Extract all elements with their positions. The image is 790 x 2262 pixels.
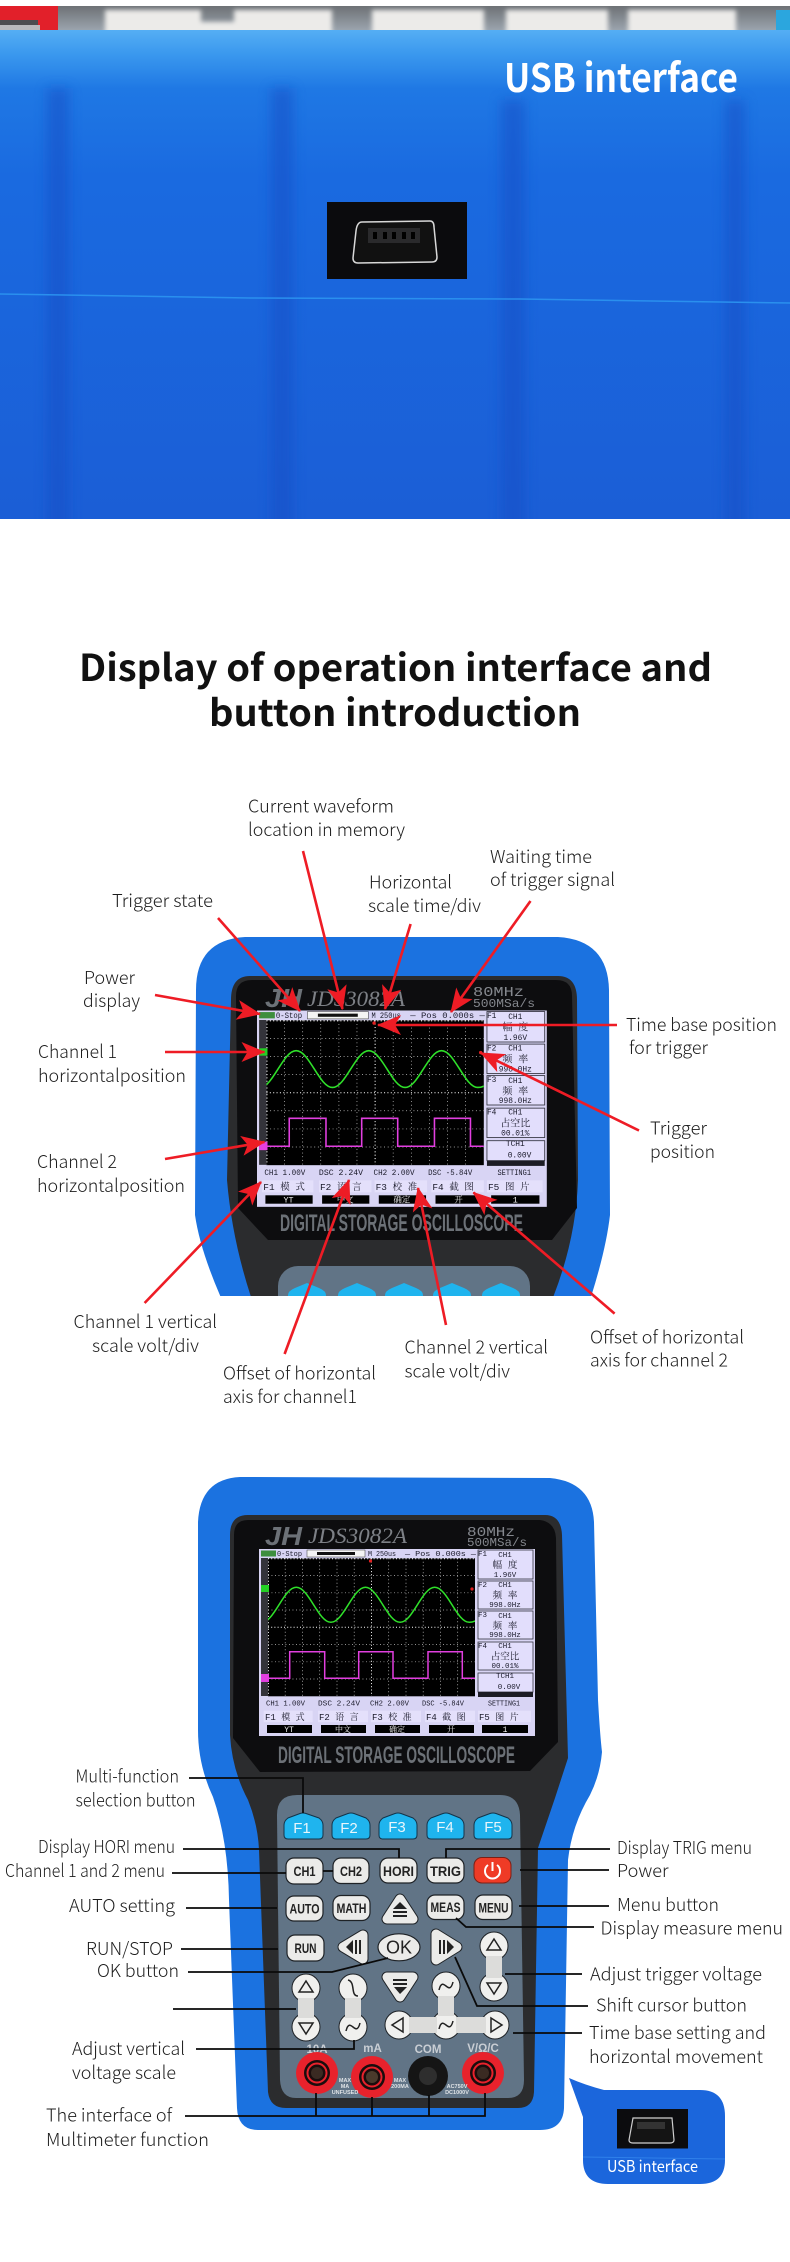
side menu: [487, 1012, 545, 1166]
keys: rounded buttons: TRIG: [430, 1863, 461, 1879]
side menu: F2: [478, 1582, 487, 1590]
logo: model name: JDS3082A: [307, 986, 406, 1011]
callout labels: screen: axis for channel1: [223, 1383, 357, 1409]
side menu: [478, 1550, 533, 1697]
callout labels: screen: scale volt/div: [92, 1332, 199, 1358]
function row: F2 语 言: [320, 1181, 362, 1193]
readout row: DSC -5.84V: [428, 1169, 473, 1178]
function keys: [284, 1813, 512, 1839]
side menu: 00.01%: [491, 1663, 519, 1671]
callout labels: buttons: Menu button: [617, 1891, 719, 1917]
callout labels: buttons: Adjust trigger voltage: [590, 1960, 762, 1986]
function row: 1: [503, 1726, 508, 1735]
function row: F1 模 式: [263, 1181, 305, 1193]
side menu: CH1: [508, 1077, 523, 1086]
side menu: F3: [478, 1612, 488, 1620]
callout labels: buttons: Multi-function: [76, 1762, 179, 1788]
device body: [230, 1515, 568, 2108]
side menu: 频 率: [502, 1052, 528, 1065]
callout labels: buttons: The interface of: [46, 2102, 173, 2128]
callout labels: buttons: Time base setting and: [589, 2019, 766, 2045]
callout labels: screen: horizontalposition: [38, 1062, 186, 1088]
top status bar: — Pos 0.000s —: [404, 1551, 477, 1559]
readout row: DSC 2.24V: [319, 1169, 363, 1178]
inset caption: USB interface: [607, 2153, 698, 2177]
function keys, partly visible: [288, 1283, 520, 1296]
function row: 中文: [337, 1194, 354, 1205]
callout labels: buttons: Channel 1 and 2 menu: [5, 1857, 165, 1883]
function row: F5 图 片: [488, 1181, 530, 1193]
multimeter jacks: V/Ω/C: [467, 2043, 499, 2055]
function row: YT: [284, 1726, 294, 1735]
multimeter jacks: 10A: [306, 2044, 328, 2056]
function row: 中文: [335, 1724, 351, 1735]
panel: USB interface photo: [0, 6, 790, 550]
function row: F5 图 片: [479, 1711, 519, 1723]
callout labels: buttons: voltage scale: [72, 2059, 176, 2085]
top status bar: 0-Stop: [276, 1012, 302, 1021]
key panel: [277, 1795, 524, 2098]
heading: USB interface: USB interface: [504, 48, 738, 104]
callout labels: screen: scale time/div: [368, 892, 481, 918]
device shell: [198, 1477, 602, 2130]
callout labels: screen: Channel 1: [38, 1038, 117, 1064]
readout row: CH1 1.00V: [266, 1700, 305, 1708]
callout labels: screen: [37, 792, 777, 1409]
top status bar: [259, 1012, 485, 1021]
title: Display of operation interface and: [79, 638, 712, 692]
callout labels: buttons: OK button: [97, 1957, 179, 1983]
multimeter jacks: MAX: [339, 2078, 351, 2084]
device caption: DIGITAL STORAGE OSCILLOSCOPE: [278, 1742, 515, 1769]
multimeter jacks: MA: [341, 2084, 349, 2090]
callout labels: screen: Power: [84, 964, 136, 990]
function row: 开: [454, 1195, 463, 1205]
function row: F4 截 图: [426, 1711, 466, 1723]
key panel, partly visible: [278, 1266, 530, 1296]
side menu: 占空比: [491, 1650, 520, 1662]
keys: rounded buttons: MEAS: [430, 1899, 460, 1915]
callout labels: screen: scale volt/div: [404, 1358, 510, 1384]
side menu: CH1: [508, 1044, 523, 1053]
blue silicone sleeve: [0, 30, 790, 519]
side menu: 0.00V: [508, 1152, 532, 1161]
side menu: 998.0Hz: [499, 1065, 532, 1074]
top status bar: M 250us: [371, 1012, 401, 1021]
callout labels: buttons: selection button: [76, 1786, 196, 1812]
side menu: CH1: [498, 1613, 512, 1621]
keys: rounded buttons: CH1: [294, 1863, 316, 1879]
callout labels: screen: location in memory: [248, 816, 405, 842]
callout labels: buttons: Adjust vertical: [72, 2035, 185, 2061]
multimeter jacks: UNFUSED: [332, 2090, 358, 2096]
keys: rounded buttons: [286, 1858, 512, 1961]
callout labels: buttons: RUN/STOP: [86, 1935, 173, 1961]
side menu: F4: [478, 1643, 488, 1651]
side menu: 998.0Hz: [489, 1602, 521, 1610]
logo: JH: JH: [265, 983, 303, 1013]
side menu: F3: [487, 1076, 497, 1085]
logo: specification: [467, 1525, 527, 1550]
side menu: CH1: [498, 1643, 512, 1651]
function row: F4 截 图: [432, 1181, 474, 1193]
function row: 确定: [394, 1194, 411, 1205]
callout labels: screen: axis for channel 2: [590, 1346, 728, 1372]
side menu: CH1: [508, 1108, 523, 1117]
top status bar: [261, 1550, 477, 1559]
callout labels: screen: Channel 2 vertical: [404, 1334, 548, 1360]
multimeter jacks: MAX: [394, 2078, 406, 2084]
multimeter jacks: COM: [415, 2044, 441, 2056]
callout labels: screen: Trigger state: [112, 887, 213, 913]
callout labels: buttons: [5, 1762, 783, 2152]
callout labels: buttons: AUTO setting: [69, 1892, 175, 1918]
side menu: F4: [487, 1108, 497, 1117]
title: button introduction: [209, 683, 581, 737]
function keys: F1: [293, 1820, 311, 1837]
side menu: CH1: [498, 1552, 512, 1560]
readout row: [266, 1700, 520, 1708]
callout labels: screen: display: [83, 987, 140, 1013]
side menu: 频 率: [493, 1590, 518, 1602]
callout labels: screen: Current waveform: [248, 792, 394, 818]
callout labels: screen: Waiting time: [490, 843, 592, 869]
multimeter jacks: mA: [363, 2043, 382, 2055]
top status bar: — Pos 0.000s —: [409, 1012, 485, 1021]
callout labels: buttons: Shift cursor button: [596, 1992, 747, 2018]
callout labels: screen: for trigger: [629, 1034, 709, 1060]
callout labels: screen: Offset of horizontal: [223, 1360, 376, 1386]
side menu: 幅 度: [493, 1559, 518, 1571]
inset: USB interface: [569, 2078, 725, 2184]
function keys: F3: [388, 1819, 406, 1836]
callout labels: screen: Horizontal: [369, 868, 452, 894]
readout row: DSC -5.84V: [422, 1700, 464, 1708]
plot: [261, 1558, 483, 1696]
readout row: CH2 2.00V: [370, 1700, 409, 1708]
device caption: DIGITAL STORAGE OSCILLOSCOPE: [280, 1210, 523, 1237]
side menu: 频 率: [493, 1620, 518, 1632]
readout row: SETTING1: [488, 1700, 520, 1708]
logo: specification: 500MSa/s: [467, 1536, 527, 1550]
callout labels: screen: Trigger: [650, 1114, 708, 1140]
side menu: 998.0Hz: [489, 1632, 521, 1640]
title: [79, 638, 712, 737]
device shell: [195, 937, 610, 1300]
keys: triangle buttons: [343, 1899, 457, 1997]
plot: [259, 1020, 492, 1165]
logo: specification: 500MSa/s: [473, 997, 535, 1011]
keyboard strip behind device: [0, 6, 790, 30]
arrows: screen callouts: [145, 851, 639, 1354]
function row: 确定: [389, 1724, 405, 1735]
callout labels: screen: Channel 1 vertical: [74, 1308, 217, 1334]
screen bezel: [236, 980, 577, 1240]
screen bezel: [233, 1520, 558, 1772]
callout labels: screen: horizontalposition: [37, 1172, 185, 1198]
device body: [227, 976, 578, 1300]
side menu: 1.96V: [494, 1572, 517, 1580]
side menu: 幅 度: [502, 1020, 528, 1033]
side menu: 00.01%: [501, 1129, 530, 1138]
multimeter jacks: AC750V: [447, 2084, 468, 2090]
keys: rounded buttons: AUTO: [290, 1900, 320, 1916]
logo: specification: 80MHz: [473, 985, 524, 1001]
multimeter jacks: DC1000V: [445, 2090, 469, 2096]
side menu: 998.0Hz: [499, 1097, 532, 1106]
callout labels: screen: position: [650, 1138, 715, 1164]
icon: mini USB port: [327, 202, 467, 279]
callout labels: screen: of trigger signal: [490, 866, 615, 892]
function row: YT: [283, 1195, 294, 1205]
function keys: F5: [484, 1819, 502, 1836]
function row: [262, 1180, 543, 1205]
side menu: F2: [487, 1044, 497, 1053]
function row: F3 校 准: [376, 1181, 418, 1193]
side menu: 1.96V: [504, 1034, 527, 1043]
callout labels: buttons: Power: [617, 1857, 669, 1883]
logo: specification: 80MHz: [467, 1525, 515, 1541]
callout labels: buttons: Display TRIG menu: [617, 1834, 752, 1860]
keys: rounded buttons: OK: [386, 1938, 412, 1958]
logo: specification: [474, 987, 534, 1007]
device photo, upper part: [195, 937, 610, 1296]
function row: 开: [447, 1725, 455, 1735]
keys: rounded buttons: MATH: [336, 1900, 366, 1916]
screen: [257, 1010, 547, 1207]
function keys: F2: [340, 1820, 358, 1837]
callout labels: screen: Channel 2: [37, 1148, 117, 1174]
screen: [259, 1549, 535, 1736]
side menu: F1: [487, 1012, 497, 1021]
leader lines: buttons: [172, 1778, 610, 2116]
readout row: CH2 2.00V: [374, 1169, 415, 1178]
function row: F1 模 式: [265, 1711, 305, 1723]
keys: adjustment pills: [292, 1932, 509, 2041]
function row: F2 语 言: [319, 1711, 359, 1723]
panel: full device with button callouts: [5, 1477, 783, 2184]
sleeve grooves: [47, 88, 745, 550]
logo: JH: JH: [265, 1521, 303, 1551]
keys: rounded buttons: HORI: [383, 1863, 414, 1879]
function row: [264, 1711, 531, 1735]
top status bar: 0-Stop: [277, 1551, 302, 1559]
side menu: CH1: [498, 1582, 512, 1590]
function keys: F4: [436, 1819, 454, 1836]
keys: rounded buttons: MENU: [478, 1900, 508, 1916]
side menu: 0.00V: [498, 1684, 521, 1692]
icon: mini USB port: [617, 2109, 688, 2148]
readout row: [264, 1170, 531, 1175]
callout labels: buttons: Display measure menu: [600, 1914, 783, 1940]
readout row: SETTING1: [497, 1169, 531, 1178]
callout labels: screen: Offset of horizontal: [590, 1324, 744, 1350]
side menu: F1: [478, 1551, 488, 1559]
side menu: TCH1: [506, 1140, 525, 1149]
function row: F3 校 准: [372, 1711, 412, 1723]
callout labels: screen: Time base position: [626, 1011, 777, 1037]
keys: rounded buttons: CH2: [340, 1863, 362, 1879]
multimeter jacks: 200MA: [391, 2084, 409, 2090]
side menu: TCH1: [496, 1673, 514, 1681]
top status bar: M 250us: [368, 1551, 396, 1559]
function row: 1: [513, 1195, 518, 1205]
readout row: CH1 1.00V: [264, 1169, 306, 1178]
logo: model name: JDS3082A: [308, 1523, 408, 1548]
panel: annotated oscilloscope screen: [37, 792, 777, 1409]
callout labels: buttons: horizontal movement: [589, 2043, 764, 2069]
callout labels: buttons: Display HORI menu: [38, 1833, 175, 1859]
side menu: 频 率: [502, 1085, 528, 1098]
callout labels: buttons: Multimeter function: [46, 2126, 209, 2152]
keys: rounded buttons: RUN: [294, 1940, 316, 1956]
side menu: CH1: [508, 1013, 523, 1022]
multimeter jacks: [296, 2043, 504, 2098]
readout row: DSC 2.24V: [318, 1700, 361, 1708]
side menu: 占空比: [500, 1117, 530, 1130]
